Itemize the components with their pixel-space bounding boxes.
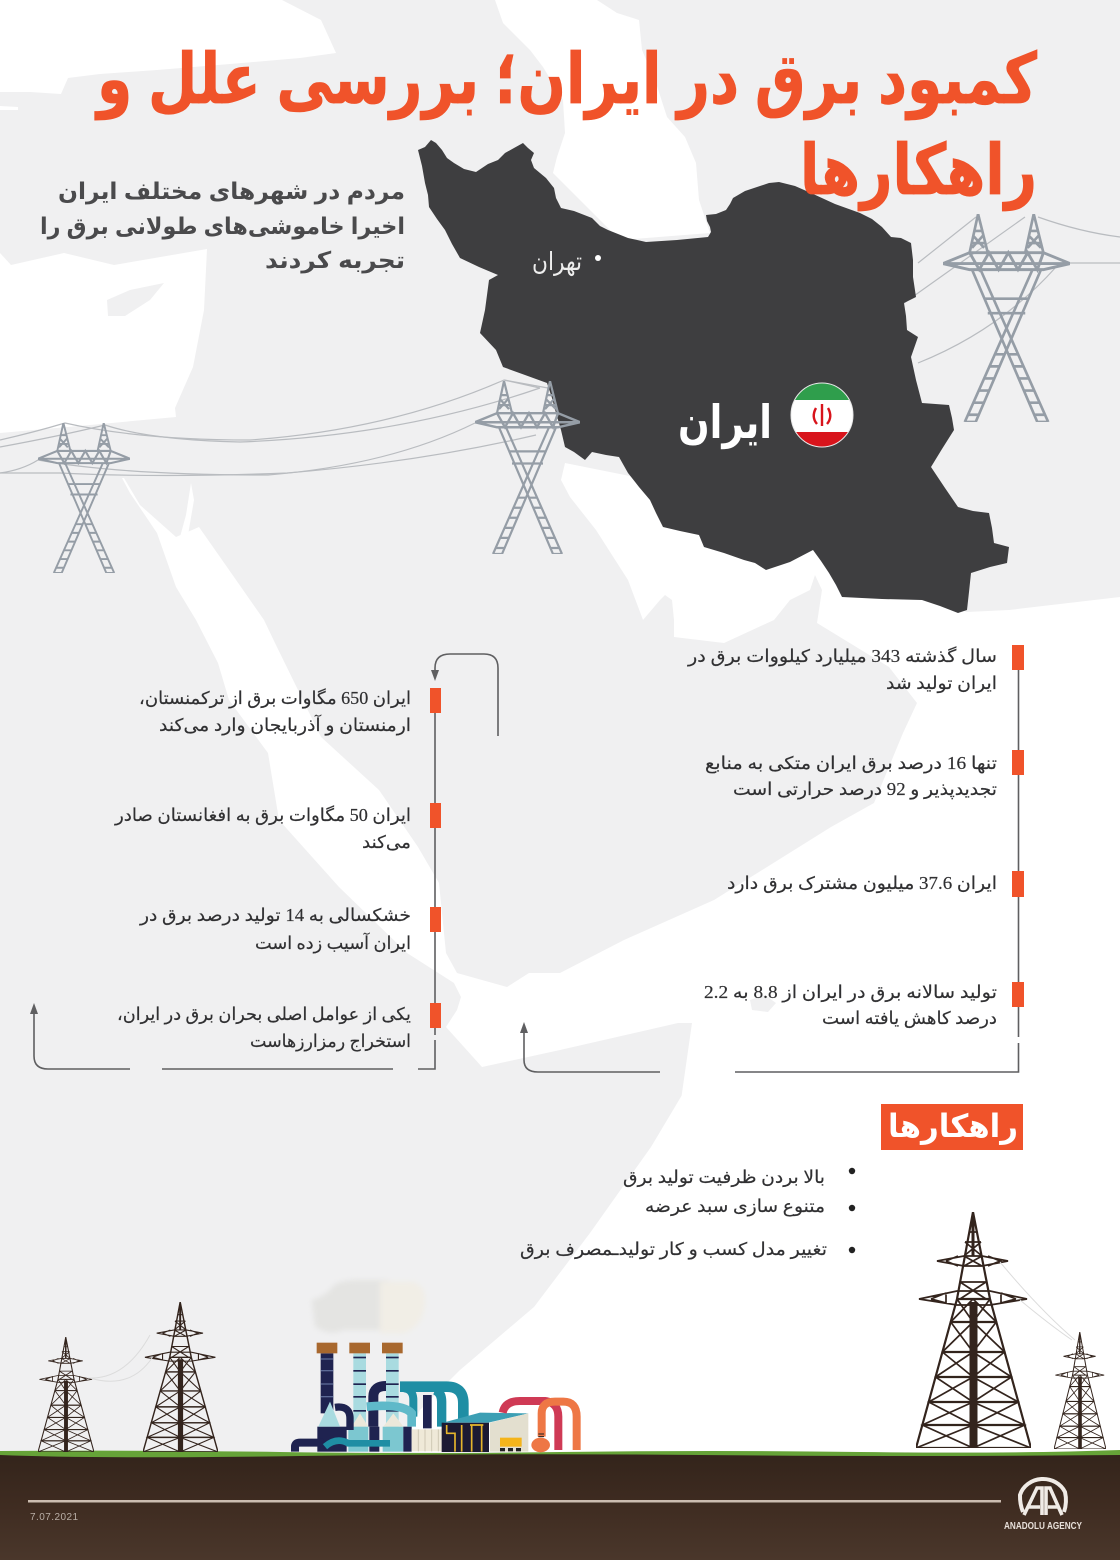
list text: یکی از عوامل اصلی بحران برق در ایران، bbox=[117, 1004, 411, 1024]
smoke bbox=[312, 1280, 425, 1333]
list text: استخراج رمزارزهاست bbox=[250, 1031, 411, 1052]
solutions bullet list bbox=[520, 1167, 855, 1260]
list text bbox=[687, 646, 997, 1028]
logo: Anadolu Agency: ANADOLU AGENCY bbox=[1004, 1520, 1082, 1532]
list text: تولید سالانه برق در ایران از 8.8 به 2.2 bbox=[704, 982, 997, 1002]
solutions bullet list: تغییر مدل کسب و کار تولیدـمصرف برق bbox=[520, 1239, 827, 1260]
orange markers bbox=[430, 688, 441, 1028]
ground bbox=[0, 1450, 1120, 1560]
connector line with arrow bbox=[520, 670, 1018, 1072]
tower: left grey pylon bbox=[38, 423, 130, 573]
list text: ایران تولید شد bbox=[886, 673, 997, 693]
panel: right statistics list bbox=[520, 645, 1024, 1072]
tower: bottom right large pylon bbox=[916, 1212, 1031, 1448]
factory illustration bbox=[295, 1280, 577, 1452]
footer line bbox=[28, 1500, 1001, 1502]
icon: Iran flag bbox=[790, 383, 854, 447]
list text: می‌کند bbox=[362, 832, 411, 852]
heading: solutions: راهکارها bbox=[888, 1108, 1018, 1145]
list text: تنها 16 درصد برق ایران متکی به منابع bbox=[705, 753, 997, 774]
tower: middle grey pylon bbox=[475, 381, 580, 554]
subtitle text: اخیرا خاموشی‌های طولانی برق را bbox=[40, 213, 405, 240]
list text: سال گذشته 343 میلیارد کیلووات برق در bbox=[687, 646, 997, 667]
title: راهکارها bbox=[800, 131, 1037, 211]
date: 7.07.2021 bbox=[30, 1512, 78, 1523]
label: Tehran: تهران bbox=[532, 249, 582, 277]
list text: ارمنستان و آذربایجان وارد می‌کند bbox=[159, 714, 411, 736]
panel: left statistics list bbox=[30, 654, 498, 1069]
list text: خشکسالی به 14 تولید درصد برق در bbox=[139, 905, 411, 925]
power lines across the map bbox=[0, 217, 1120, 476]
chimneys bbox=[317, 1343, 403, 1428]
list text: تجدیدپذیر و 92 درصد حرارتی است bbox=[733, 779, 997, 800]
solutions bullet list: بالا بردن ظرفیت تولید برق bbox=[623, 1167, 825, 1187]
list text: درصد کاهش یافته است bbox=[822, 1008, 997, 1028]
subtitle text: تجربه کردند bbox=[265, 247, 405, 274]
subtitle text: مردم در شهرهای مختلف ایران bbox=[58, 178, 405, 205]
connector line with arrows bbox=[30, 654, 498, 1069]
list text: ایران 650 مگاوات برق از ترکمنستان، bbox=[139, 688, 411, 709]
title bbox=[95, 40, 1037, 211]
list text: ایران آسیب زده است bbox=[255, 932, 411, 953]
buildings bbox=[412, 1413, 528, 1452]
tower: bottom far-left pylon bbox=[38, 1337, 94, 1452]
tower: bottom left pylon bbox=[143, 1302, 218, 1452]
solutions bullet list: متنوع سازی سبد عرضه bbox=[645, 1196, 825, 1217]
logo: Anadolu Agency bbox=[1004, 1479, 1082, 1532]
list text: ایران 37.6 میلیون مشترک برق دارد bbox=[727, 873, 997, 893]
pipes and base blocks bbox=[295, 1386, 463, 1452]
orange markers bbox=[1012, 645, 1024, 1007]
list text bbox=[114, 688, 411, 1052]
tower: bottom far-right pylon bbox=[1054, 1332, 1106, 1449]
label: Iran: ایران bbox=[678, 396, 772, 449]
tower: right grey pylon bbox=[943, 214, 1070, 422]
red and orange pipes bbox=[503, 1401, 577, 1452]
subtitle text bbox=[40, 178, 405, 274]
Iran map bbox=[418, 140, 1009, 613]
list text: ایران 50 مگاوات برق به افغانستان صادر bbox=[114, 805, 411, 826]
thin wires between bottom pylons bbox=[88, 1262, 1075, 1381]
